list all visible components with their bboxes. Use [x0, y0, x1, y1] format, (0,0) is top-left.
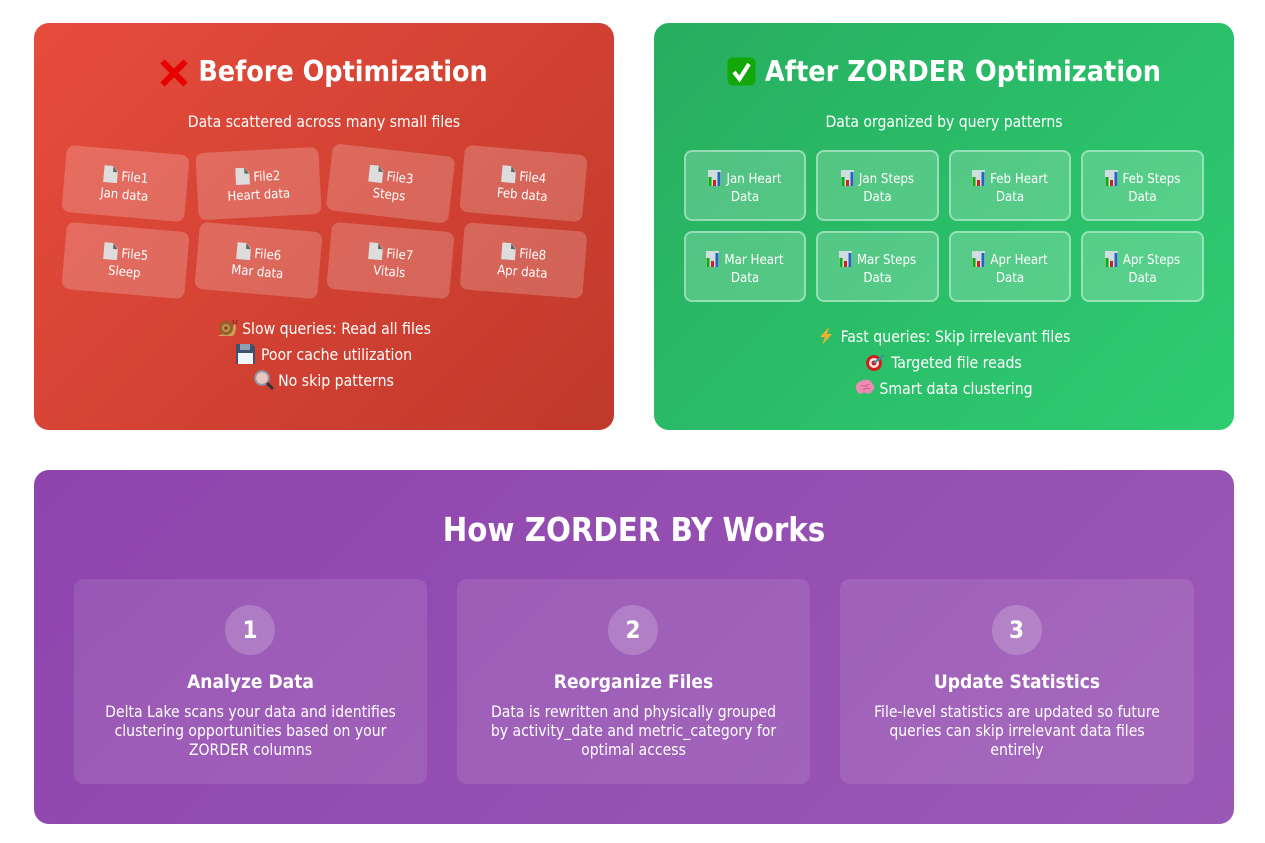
step 1 card: [74, 579, 427, 784]
step 2 number: 2: [625, 616, 641, 644]
file card 8: Apr data: [496, 263, 547, 282]
subtitle: scattered data: Data scattered across many small files: [188, 112, 460, 130]
data cell 7: Apr Heart: [990, 253, 1048, 268]
file card 7: [326, 222, 454, 299]
panel: before optimization: [34, 23, 614, 430]
data cell 8: Data: [1128, 271, 1157, 286]
data cell 6: Data: [863, 271, 892, 286]
step 1 description: [105, 703, 396, 759]
data cell 6: Mar Steps: [857, 253, 916, 268]
data cell 1: Data: [731, 190, 759, 205]
point: smart clustering: Smart data clustering: [879, 378, 1033, 398]
file card 6: File6: [253, 247, 281, 264]
data cell 2: Jan Steps: [859, 172, 914, 187]
subtitle: organized data: Data organized by query patterns: [825, 112, 1063, 130]
file card 3: Steps: [372, 186, 406, 205]
step 2 number: [608, 605, 658, 655]
step 1 number: [225, 605, 275, 655]
file card 4: File4: [518, 170, 546, 187]
panel: after zorder optimization: [654, 23, 1234, 430]
data cell 5: Data: [731, 271, 759, 286]
step 2 card: [457, 579, 810, 784]
file card 8: File8: [518, 247, 546, 264]
step 1 description: Delta Lake scans your data and identifies: [105, 703, 396, 721]
step 2 title: Reorganize Files: [554, 671, 713, 693]
step 3 description: File-level statistics are updated so future: [874, 703, 1160, 721]
step 3 number: 3: [1009, 616, 1024, 644]
file card 8: [459, 222, 586, 299]
step 3 description: entirely: [990, 741, 1044, 759]
data cell 7: Data: [996, 271, 1024, 286]
file card 2: [195, 147, 321, 220]
point: poor cache: Poor cache utilization: [261, 345, 412, 364]
heading: before optimization: Before Optimization: [198, 55, 488, 88]
point: fast queries: Fast queries: Skip irrelevant files: [841, 326, 1070, 346]
file card 3: [326, 143, 455, 224]
data cell 1: [684, 150, 806, 221]
file card 1: [61, 145, 189, 222]
data cell 5: Mar Heart: [724, 253, 784, 268]
step 2 description: by activity_date and metric_category for: [491, 722, 776, 740]
step 1 description: clustering opportunities based on your: [115, 722, 386, 740]
data cell 6: [816, 231, 939, 302]
data cell 4: Data: [1128, 190, 1157, 205]
step 2 description: Data is rewritten and physically grouped: [491, 703, 776, 721]
file card 2: File2: [253, 169, 280, 185]
step 2 description: [491, 703, 776, 759]
file card 1: File1: [121, 170, 149, 187]
step 1 title: Analyze Data: [187, 671, 314, 693]
data cell 4: Feb Steps: [1123, 172, 1180, 187]
data cell 7: [949, 231, 1071, 302]
heading: how zorder by works: How ZORDER BY Works: [443, 511, 825, 549]
data cell 3: Data: [996, 190, 1024, 205]
point: slow queries: Slow queries: Read all files: [242, 319, 431, 338]
file card 6: [194, 222, 322, 299]
data cell 8: [1081, 231, 1204, 302]
file card 5: Sleep: [107, 264, 141, 281]
file card 1: Jan data: [100, 186, 149, 205]
heading: after zorder optimization: After ZORDER Optimization: [765, 55, 1161, 88]
file card 4: [459, 145, 587, 222]
file card 6: Mar data: [230, 263, 283, 282]
data cell 3: Feb Heart: [990, 172, 1048, 187]
data cell 4: [1081, 150, 1204, 221]
file card 5: [61, 222, 189, 299]
data cell 2: [816, 150, 939, 221]
point: targeted reads: Targeted file reads: [891, 352, 1022, 372]
data cell 2: Data: [863, 190, 892, 205]
step 1 description: ZORDER columns: [189, 741, 312, 759]
step 3 title: Update Statistics: [934, 671, 1100, 693]
file card 5: File5: [121, 247, 149, 264]
point: no skip patterns: No skip patterns: [278, 371, 394, 390]
file card 3: File3: [386, 170, 414, 188]
panel: how zorder by works: [34, 470, 1234, 824]
step 3 description: queries can skip irrelevant data files: [889, 722, 1145, 740]
step 3 description: [874, 703, 1160, 759]
file card 2: Heart data: [227, 186, 290, 205]
data cell 8: Apr Steps: [1123, 253, 1180, 268]
data cell 3: [949, 150, 1071, 221]
data cell 1: Jan Heart: [726, 172, 782, 187]
step 1 number: 1: [242, 616, 258, 644]
file card 4: Feb data: [496, 186, 548, 205]
file card 7: File7: [386, 247, 414, 264]
step 2 description: optimal access: [581, 741, 686, 759]
file card 7: Vitals: [373, 264, 406, 281]
step 3 number: [992, 605, 1042, 655]
step 3 card: [840, 579, 1194, 784]
data cell 5: [684, 231, 806, 302]
